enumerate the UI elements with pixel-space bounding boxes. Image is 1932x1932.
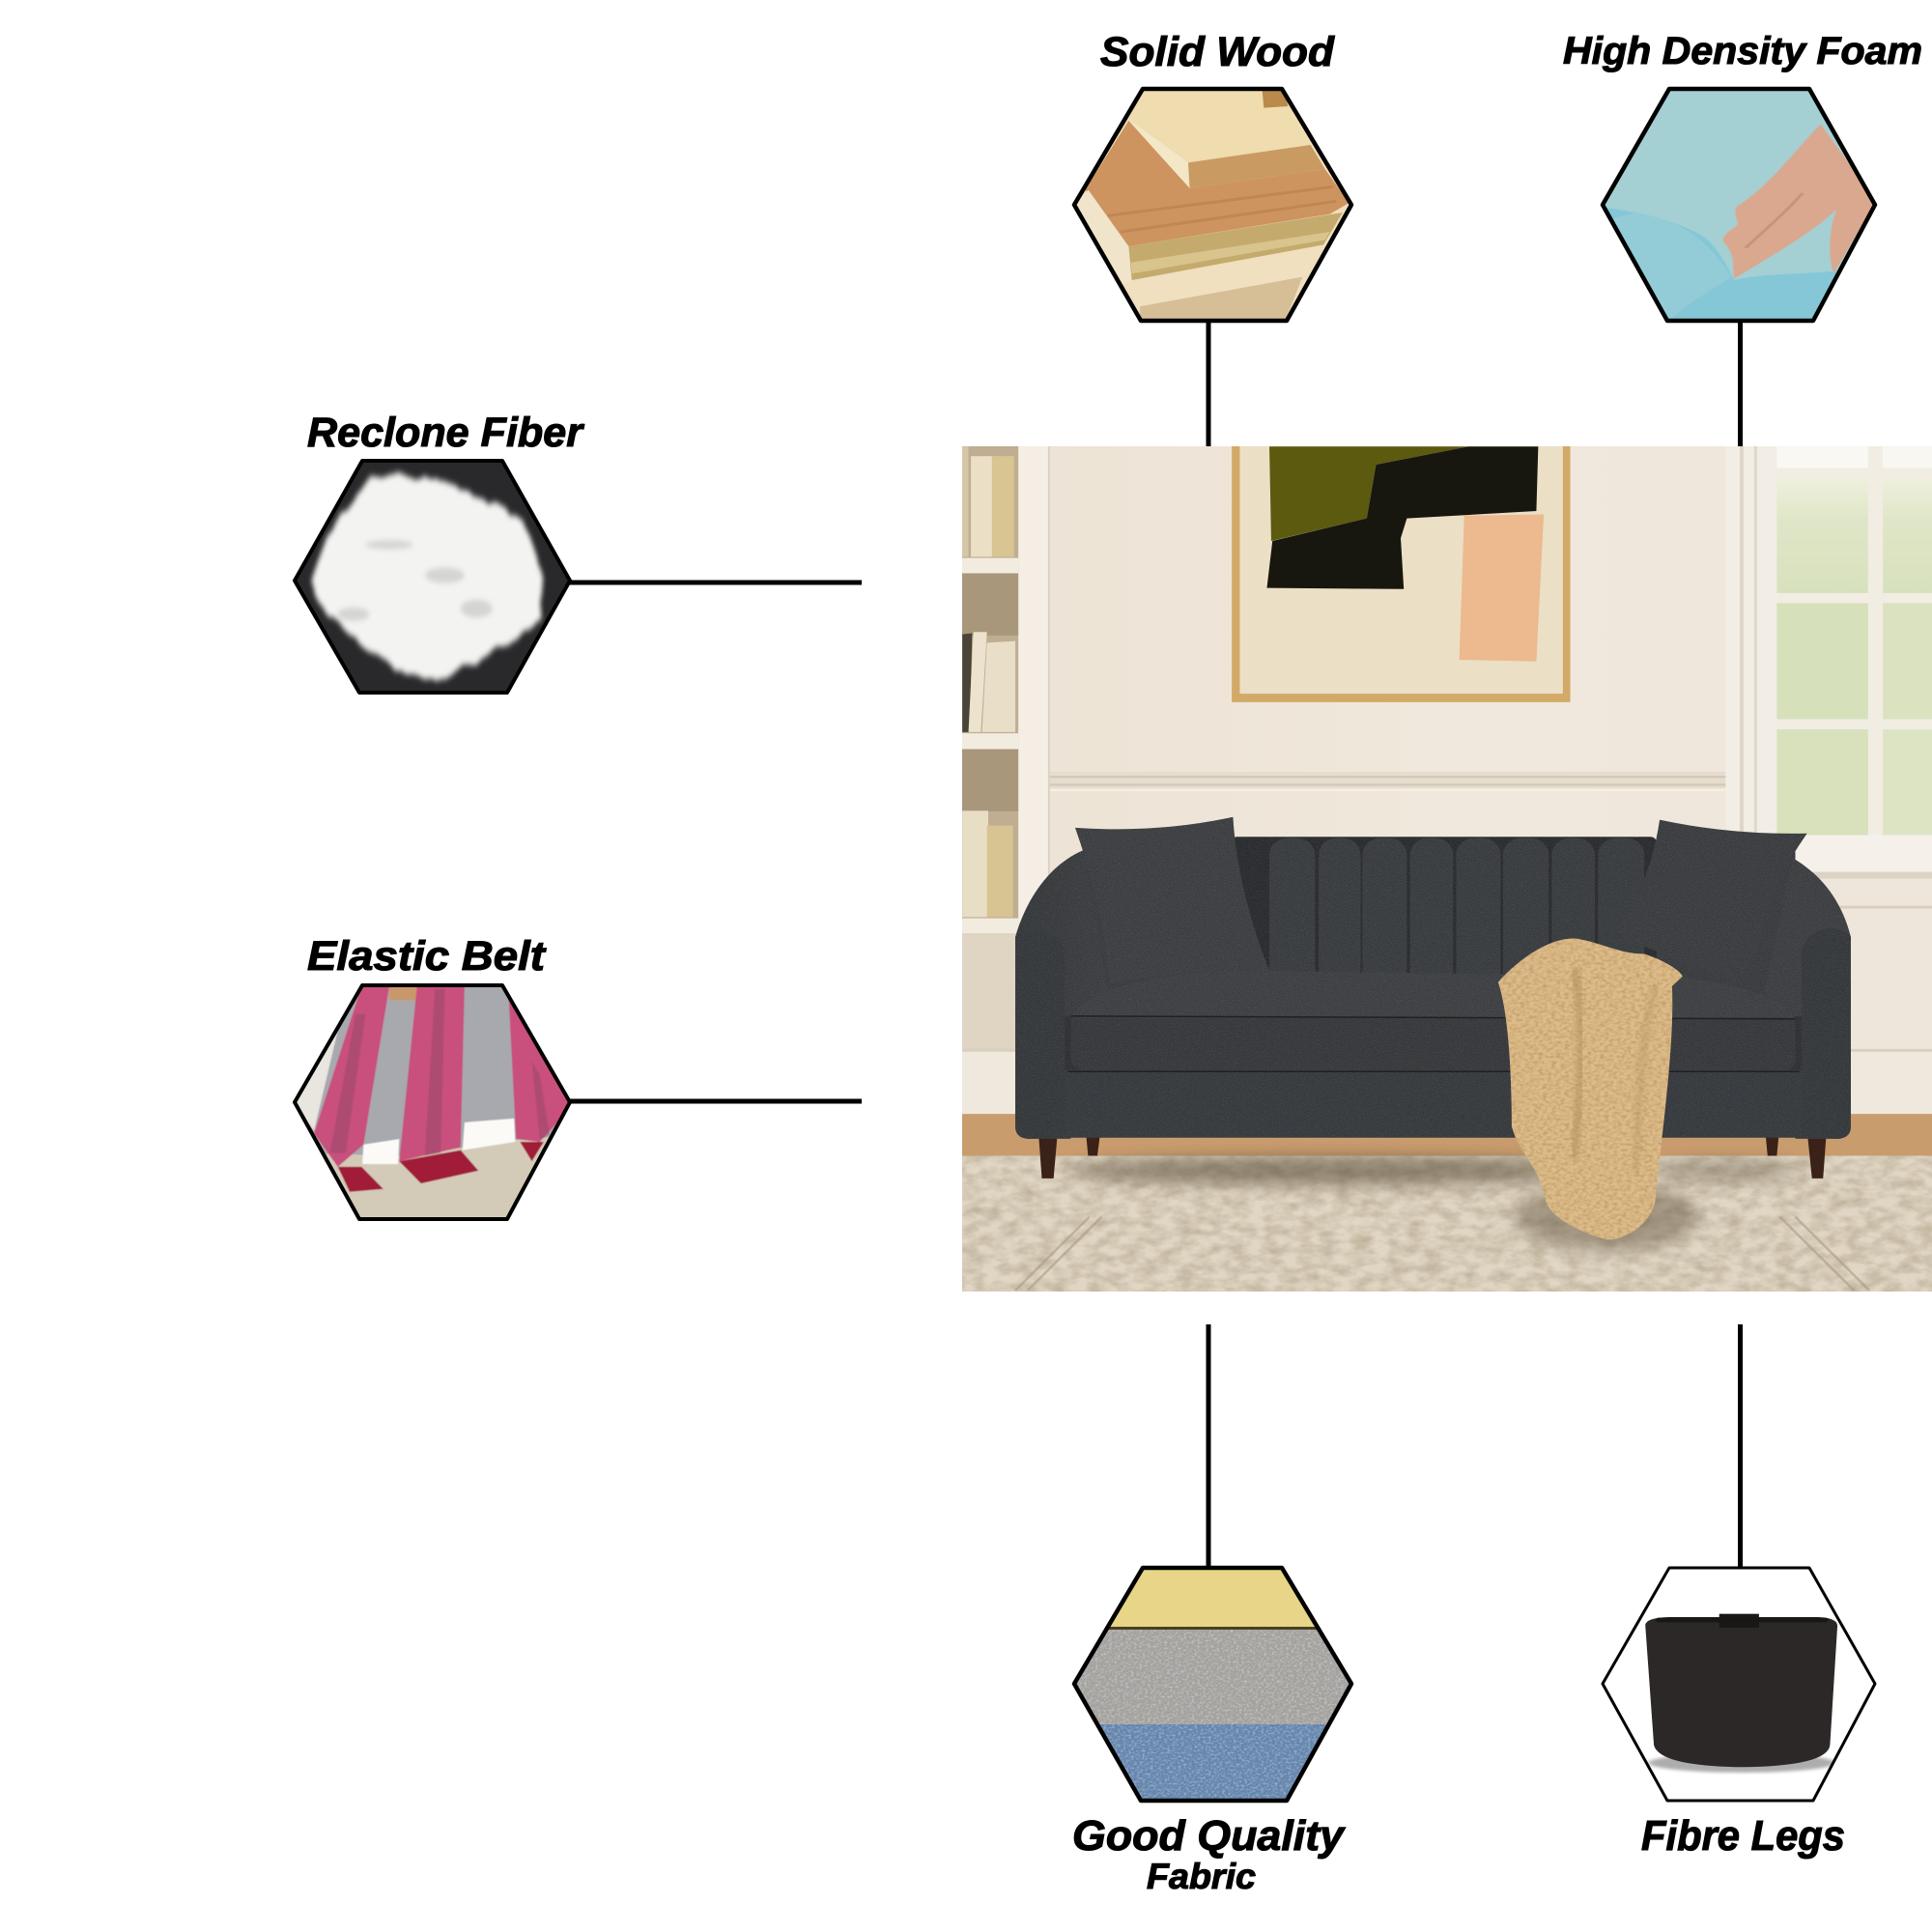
connector: high density foam to photo [1738,321,1743,446]
wall [1018,446,1932,1049]
hexagon: good quality fabric [1067,1565,1357,1804]
sofa upholstery [1015,817,1851,1139]
label: Fibre Legs: Fibre Legs [1641,1812,1845,1860]
rug [960,1155,1932,1294]
label: Solid Wood: Solid Wood [1100,29,1335,75]
hexagon: elastic belt [290,980,576,1225]
window [1725,442,1932,909]
sofa [1015,817,1851,1179]
hexagon: solid wood [1072,87,1355,322]
painting [1232,442,1571,702]
hexagon outline [1074,89,1351,321]
throw blanket [1498,939,1683,1239]
hexagon: high density foam [1598,87,1882,322]
connector: good quality fabric to photo [1206,1324,1211,1569]
connector: solid wood to photo [1206,321,1211,446]
panel: sofa room photo [960,442,1932,1294]
sofa seams [1067,1016,1800,1071]
bookshelf [960,442,1050,1052]
hexagon: reclone fiber [290,454,575,696]
hexagon outline [1074,1568,1351,1801]
wainscot moulding [1049,772,1725,791]
label: High Density Foam: High Density Foam [1563,30,1922,72]
hexagon outline [295,985,570,1219]
hexagon outline [1603,1568,1875,1801]
hexagon: fibre legs [1599,1563,1884,1804]
label: Fabric: Fabric [1147,1857,1256,1896]
connector: reclone fiber to photo [568,580,862,585]
hexagon outline [295,461,570,693]
connector: fibre legs to photo [1738,1324,1743,1569]
label: Good Quality: Good Quality [1072,1812,1347,1860]
sofa legs [1038,1137,1826,1179]
label: Elastic Belt: Elastic Belt [307,933,547,980]
hexagon outline [1603,89,1875,321]
baseboard and floor [960,1049,1932,1156]
connector: elastic belt to photo [568,1099,862,1103]
label: Reclone Fiber: Reclone Fiber [307,410,584,456]
